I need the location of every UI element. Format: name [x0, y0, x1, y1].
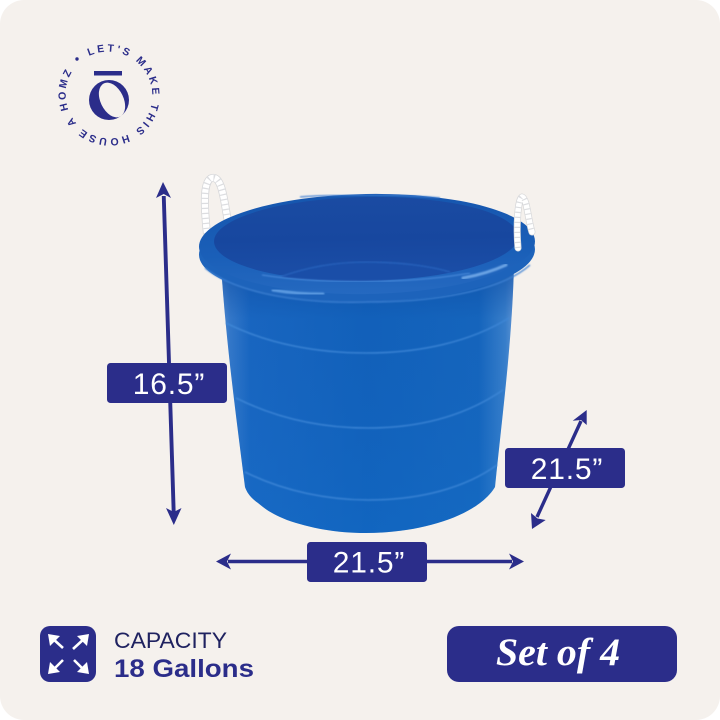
tub interior	[213, 194, 519, 284]
capacity value: 18 Gallons	[114, 655, 254, 683]
set of 4 badge: Set of 4	[496, 631, 620, 674]
logo dot	[75, 57, 79, 61]
left rope handle	[205, 178, 228, 234]
set of 4 badge	[447, 626, 677, 682]
depth dimension: 21.5 inches	[505, 410, 625, 529]
width label	[307, 542, 427, 582]
logo circular slogan: LET'S MAKE THIS HOUSE A HOMZ	[58, 44, 160, 146]
tub rim	[198, 191, 536, 305]
height label: 16.5”	[133, 368, 205, 401]
capacity block	[40, 626, 254, 683]
width arrow	[216, 554, 524, 570]
product: blue rope-handled tub	[198, 178, 536, 533]
depth label: 21.5”	[531, 453, 603, 486]
logo mark	[89, 71, 130, 122]
right rope handle	[517, 197, 532, 248]
tub ridges	[226, 318, 509, 500]
width dimension: 21.5 inches	[216, 542, 524, 582]
icon: expand arrows	[40, 626, 96, 682]
tub body	[221, 265, 514, 533]
height arrow	[156, 182, 182, 525]
height dimension: 16.5 inches	[107, 182, 227, 525]
height label	[107, 363, 227, 403]
depth arrow	[531, 410, 587, 529]
capacity label: CAPACITY	[114, 628, 227, 653]
width label: 21.5”	[333, 546, 405, 580]
logo badge	[58, 44, 160, 146]
